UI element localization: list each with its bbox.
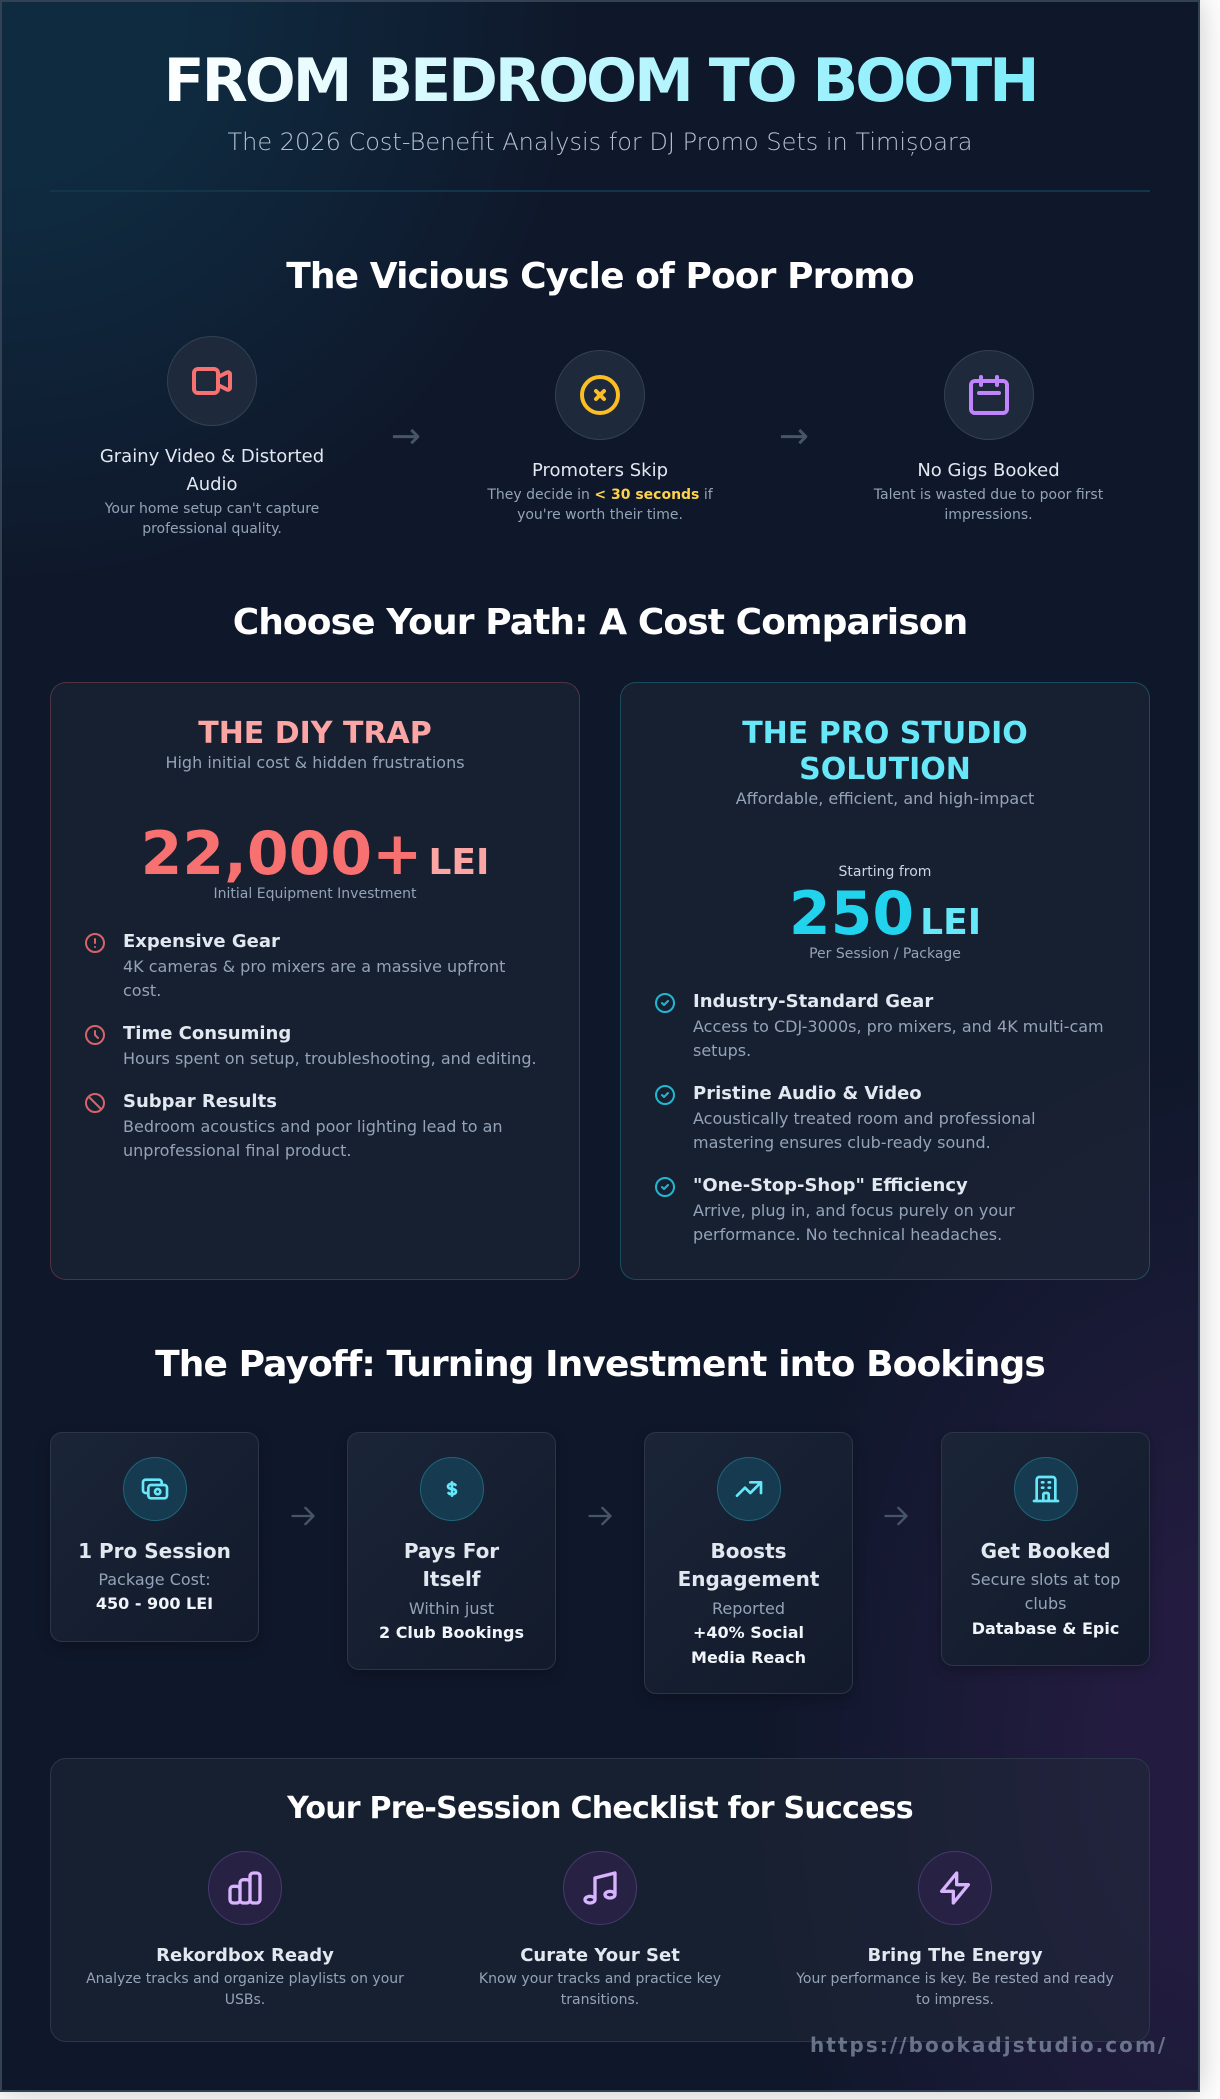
checklist item: curate: Know your tracks and practice key: [479, 1971, 721, 1987]
icon: x circle: [555, 350, 645, 440]
panel: vicious cycle steps: [100, 336, 1103, 537]
panel: pro studio: Arrive, plug in, and focus purely on your: [693, 1201, 1015, 1220]
flow title: 1 Pro Session: [78, 1539, 231, 1563]
list item: gear: [655, 991, 1104, 1060]
step title: Promoters Skip: [532, 460, 668, 481]
icon: check: [655, 1177, 675, 1197]
flow text: 450 - 900 LEI: [96, 1594, 213, 1613]
card title: THE DIY TRAP: [198, 716, 432, 751]
arrow: [291, 1506, 315, 1526]
step description: impressions.: [944, 507, 1033, 523]
heading: payoff: The Payoff: Turning Investment into Bookings: [155, 1344, 1045, 1385]
flow card: pays for itself: [347, 1432, 556, 1670]
flow title: Pays For: [404, 1539, 499, 1563]
header divider: [50, 190, 1150, 192]
title: FROM BEDROOM TO BOOTH: [164, 46, 1036, 116]
icon: alert: [85, 933, 105, 953]
card title: [742, 716, 1028, 787]
arrow: [588, 1506, 612, 1526]
step title: No Gigs Booked: [917, 460, 1060, 481]
price: 22,000+LEI: [141, 819, 489, 889]
panel: pro studio: setups.: [693, 1041, 751, 1060]
icon: calendar: [944, 350, 1034, 440]
starting from: Starting from: [839, 864, 931, 880]
step title: Grainy Video & Distorted: [100, 446, 324, 467]
step title: Audio: [186, 474, 238, 495]
arrow: →: [391, 416, 421, 457]
flow text: Database & Epic: [972, 1619, 1119, 1638]
step description: [104, 501, 319, 537]
step description: professional quality.: [142, 521, 282, 537]
heading: cost comparison: Choose Your Path: A Cost Comparison: [233, 602, 967, 643]
heading: vicious cycle: The Vicious Cycle of Poor Promo: [286, 256, 914, 297]
icon: video camera: [167, 336, 257, 426]
checklist item: curate: Curate Your Set: [520, 1945, 680, 1966]
card subtitle: Affordable, efficient, and high-impact: [736, 789, 1034, 808]
flow card: boosts engagement: [644, 1432, 853, 1694]
panel: pro studio: Access to CDJ-3000s, pro mixers, and 4K multi-cam: [693, 1017, 1104, 1036]
panel: DIY trap: Hours spent on setup, troubleshooting, and editing.: [123, 1049, 537, 1068]
flow text: Secure slots at top: [971, 1570, 1120, 1589]
panel: pro studio: Pristine Audio & Video: [693, 1083, 922, 1104]
icon: music note: [563, 1851, 637, 1925]
price: 250LEI: [789, 879, 981, 949]
flow title: [678, 1539, 819, 1591]
panel: pro studio: Acoustically treated room and professional: [693, 1109, 1036, 1128]
flow title: Itself: [422, 1567, 481, 1591]
flow text: 2 Club Bookings: [379, 1623, 524, 1642]
panel: DIY trap: Expensive Gear: [123, 931, 280, 952]
checklist item: rekordbox: Analyze tracks and organize playlists on your: [86, 1971, 404, 1987]
list item: efficiency: [655, 1175, 1015, 1244]
step title: [100, 446, 324, 495]
price caption: Initial Equipment Investment: [214, 886, 416, 902]
icon: check: [655, 993, 675, 1013]
checklist item: rekordbox: [86, 1851, 404, 2008]
website url: https://bookadjstudio.com/: [810, 2033, 1167, 2057]
icon: bars: [208, 1851, 282, 1925]
step description: Your home setup can't capture: [105, 501, 319, 517]
checklist item: curate: transitions.: [561, 1992, 639, 2008]
flow text: [96, 1570, 213, 1613]
checklist item: rekordbox: USBs.: [225, 1992, 265, 2008]
icon: ban: [85, 1093, 105, 1113]
panel: pro studio: Industry-Standard Gear: [693, 991, 933, 1012]
flow text: +40% Social: [693, 1623, 804, 1642]
panel: DIY trap: cost.: [123, 981, 161, 1000]
flow text: Reported: [712, 1599, 785, 1618]
flow title: Engagement: [678, 1567, 819, 1591]
step: grainy video: [100, 336, 324, 537]
flow title: Boosts: [710, 1539, 787, 1563]
flow text: [691, 1599, 806, 1667]
icon: trending up: [716, 1457, 780, 1521]
list item: time consuming: [85, 1023, 537, 1068]
flow text: [379, 1599, 524, 1642]
checklist heading: Your Pre-Session Checklist for Success: [287, 1791, 913, 1826]
icon: bolt: [918, 1851, 992, 1925]
flow text: Package Cost:: [98, 1570, 211, 1589]
flow title: Get Booked: [981, 1539, 1110, 1563]
list item: subpar results: [85, 1091, 503, 1160]
checklist item: energy: [796, 1851, 1114, 2008]
checklist item: curate: [479, 1851, 721, 2008]
panel: DIY trap: [50, 682, 580, 1280]
checklist item: energy: Your performance is key. Be rested and ready: [796, 1971, 1114, 1987]
icon: building: [1014, 1457, 1078, 1521]
icon: cash: [122, 1457, 186, 1521]
flow text: clubs: [1025, 1594, 1066, 1613]
checklist item: energy: Bring The Energy: [867, 1945, 1043, 1966]
flow card: pro session: [50, 1432, 259, 1642]
list item: expensive gear: [85, 931, 505, 1000]
card title: THE PRO STUDIO: [742, 716, 1028, 751]
icon: check: [655, 1085, 675, 1105]
panel: pro studio: performance. No technical headaches.: [693, 1225, 1002, 1244]
arrow: [884, 1506, 908, 1526]
panel: pro studio: "One-Stop-Shop" Efficiency: [693, 1175, 968, 1196]
flow text: [971, 1570, 1120, 1638]
panel: checklist: [50, 1758, 1150, 2042]
panel: DIY trap: unprofessional final product.: [123, 1141, 352, 1160]
step: no gigs: [874, 350, 1103, 523]
subtitle: The 2026 Cost-Benefit Analysis for DJ Promo Sets in Timișoara: [228, 128, 972, 156]
step description: you're worth their time.: [517, 507, 683, 523]
checklist item: energy: to impress.: [916, 1992, 994, 2008]
flow text: Media Reach: [691, 1648, 806, 1667]
card subtitle: High initial cost & hidden frustrations: [165, 753, 465, 772]
list item: audio: [655, 1083, 1036, 1152]
step description: [874, 487, 1103, 523]
panel: DIY trap: Time Consuming: [123, 1023, 291, 1044]
panel: pro studio: [620, 682, 1150, 1280]
icon: dollar: [420, 1457, 484, 1521]
icon: clock: [85, 1025, 105, 1045]
arrow: →: [779, 416, 809, 457]
step description: They decide in < 30 seconds if: [487, 487, 713, 503]
flow card: get booked: [941, 1432, 1150, 1666]
panel: DIY trap: Subpar Results: [123, 1091, 277, 1112]
step: promoters skip: [487, 350, 713, 523]
price caption: Per Session / Package: [809, 946, 961, 962]
flow text: Within just: [409, 1599, 494, 1618]
checklist item: rekordbox: Rekordbox Ready: [156, 1945, 334, 1966]
panel: DIY trap: 4K cameras & pro mixers are a massive upfront: [123, 957, 505, 976]
panel: pro studio: mastering ensures club-ready sound.: [693, 1133, 991, 1152]
step description: Talent is wasted due to poor first: [874, 487, 1103, 503]
flow title: [404, 1539, 500, 1591]
card title: SOLUTION: [799, 752, 971, 787]
panel: DIY trap: Bedroom acoustics and poor lighting lead to an: [123, 1117, 503, 1136]
step description: [487, 487, 713, 523]
